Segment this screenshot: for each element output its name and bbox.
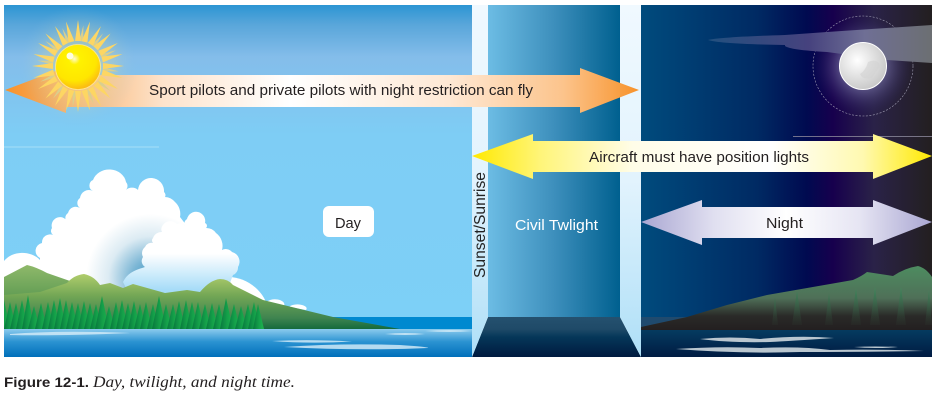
divider bar: sunset/sunrise (472, 5, 488, 357)
night hill (641, 266, 932, 330)
water highlights: night (676, 337, 924, 353)
caption: Figure 12-1. (4, 374, 89, 390)
panel: day sky (4, 5, 472, 330)
divider bar: end of civil twilight (620, 5, 641, 357)
arrow: night (641, 200, 932, 245)
arrow: sport and private pilots: Sport pilots and private pilots with night restriction can fly (149, 83, 534, 99)
icon: sun (18, 6, 138, 126)
water highlights: day (10, 330, 472, 349)
day water (4, 329, 472, 357)
caption: Day, twilight, and night time. (92, 374, 295, 391)
large cumulus cloud (36, 169, 190, 290)
back hill (4, 265, 75, 300)
panel: night sky (641, 5, 932, 330)
night water (641, 330, 932, 357)
night sea horizon (641, 317, 701, 330)
forest (0, 295, 264, 329)
small cloud tops on the ridge (266, 299, 307, 310)
night forest (772, 287, 932, 325)
twilight floor (472, 317, 641, 357)
far left cloud (4, 253, 40, 290)
label: day (323, 206, 374, 237)
front cumulus cloud (123, 212, 240, 296)
label: civil twilight: Civil Twlight (515, 218, 598, 234)
arrow: sport and private pilots (5, 67, 639, 113)
caption (4, 374, 295, 391)
arrow: position lights: Aircraft must have position lights (589, 150, 809, 166)
panel: civil twilight (488, 5, 620, 317)
label: day: Day (335, 215, 361, 232)
arrow: night: Night (766, 215, 804, 232)
icon: moon with halo and cloud (708, 16, 932, 116)
arrow: position lights (472, 134, 932, 179)
label: sunset/sunrise: Sunset/Sunrise (472, 172, 489, 278)
clouds (4, 169, 307, 310)
front hill (4, 274, 400, 329)
sea horizon: day (330, 317, 472, 330)
cloud behind right hill (220, 277, 266, 304)
